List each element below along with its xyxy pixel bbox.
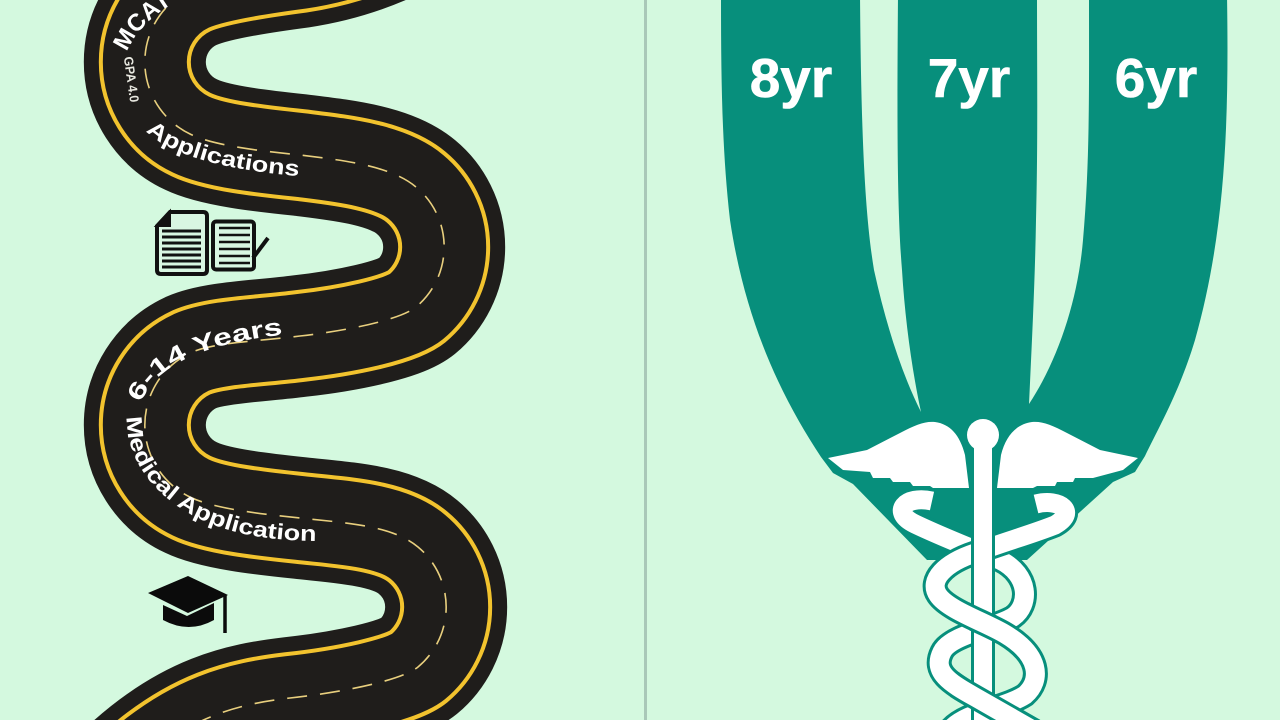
gap between bands: right xyxy=(1029,0,1089,404)
teal bands xyxy=(721,0,1227,560)
road label: Applications: Applications xyxy=(146,124,298,176)
left wing xyxy=(828,422,969,488)
road label: 6-14 Years: 6-14 Years xyxy=(129,322,282,400)
icon: graduation cap xyxy=(148,576,228,633)
band label: 7yr: 7yr xyxy=(928,47,1010,109)
road label: GPA: GPA 4.0 xyxy=(121,56,142,103)
right wing xyxy=(997,422,1138,488)
staff ball xyxy=(967,419,999,451)
snake strands behind staff xyxy=(902,500,1066,720)
road label: Medical Application: Medical Application xyxy=(126,417,315,541)
icon: documents xyxy=(156,211,268,274)
divider xyxy=(644,0,647,720)
gap between bands: left xyxy=(860,0,921,412)
winding road xyxy=(130,0,520,720)
band label: 6yr: 6yr xyxy=(1115,47,1197,109)
icon: caduceus xyxy=(828,419,1138,720)
snake strands over staff xyxy=(950,602,1040,720)
staff xyxy=(971,445,995,720)
panel: caduceus pathways xyxy=(721,0,1227,720)
panel: road journey xyxy=(84,0,508,720)
band label: 8yr: 8yr xyxy=(750,47,832,109)
